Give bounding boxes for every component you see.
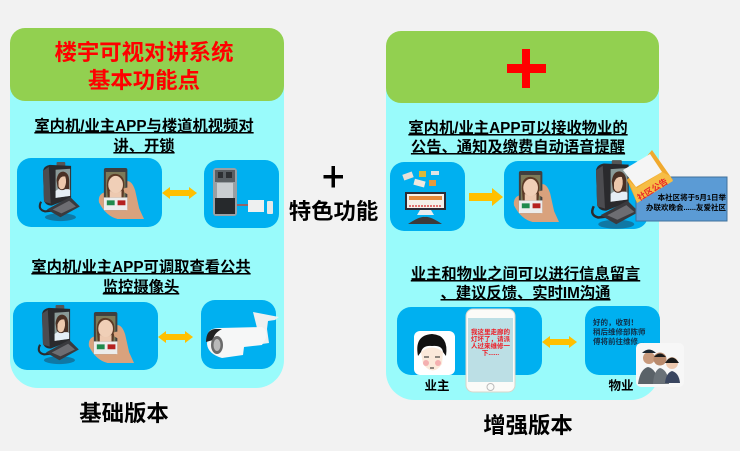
plus sign between versions xyxy=(324,166,343,188)
panel: surveillance camera xyxy=(201,300,279,369)
icon: owner avatar xyxy=(414,331,455,375)
panel: indoor unit and app xyxy=(17,158,162,227)
arrow: two-way messages xyxy=(542,336,577,348)
panel: property reply: 好的，收到！ xyxy=(593,318,638,327)
panel: door station with lock xyxy=(204,160,279,228)
panel: property reply xyxy=(585,306,660,375)
icon: phone with message: 灯坏了，请派 xyxy=(471,334,510,343)
label: basic version: 基础版本 xyxy=(79,401,169,426)
panel header: basic features title xyxy=(10,28,284,101)
panel header: basic features title: 楼宇可视对讲系统 xyxy=(54,40,234,65)
panel header with red plus xyxy=(386,31,659,103)
callout: community notice xyxy=(636,177,727,221)
arrow: notice to devices xyxy=(469,188,503,206)
panel: property reply: 傅将前往维修... xyxy=(593,336,644,346)
heading: view public cameras: 室内机/业主APP可调取查看公共 xyxy=(31,259,251,276)
arrow: two-way camera xyxy=(158,331,193,343)
panel header: basic features title: 基本功能点 xyxy=(88,68,200,93)
panel: resident devices xyxy=(504,160,648,229)
icon: phone with message xyxy=(466,309,515,392)
panel: property management computer xyxy=(390,162,465,231)
icon: phone with message: 人过来维修一 xyxy=(471,341,510,350)
icon: phone with message: 我这里走廊的 xyxy=(471,329,510,336)
photo: property staff xyxy=(636,343,684,387)
heading: messages and IM: 、建议反馈、实时IM沟通 xyxy=(441,284,610,302)
label: special features: 特色功能 xyxy=(289,199,378,224)
panel: basic version xyxy=(10,28,284,388)
heading: notices and reminders: 公告、通知及缴费自动语音提醒 xyxy=(411,138,625,156)
label: owner: 业主 xyxy=(424,378,450,393)
heading: view public cameras: 监控摄像头 xyxy=(103,278,179,296)
icon: notice envelope xyxy=(623,150,673,203)
callout: community notice: 办联欢晚会......友爱社区 xyxy=(646,202,726,212)
arrow: two-way xyxy=(162,187,197,199)
panel: owner message xyxy=(397,307,542,392)
heading: messages and IM: 业主和物业之间可以进行信息留言 xyxy=(411,266,640,283)
heading: video intercom and unlock: 讲、开锁 xyxy=(113,137,175,155)
heading: notices and reminders: 室内机/业主APP可以接收物业的 xyxy=(408,120,628,137)
panel: indoor unit and app, camera view xyxy=(13,302,158,370)
panel: property reply: 稍后维修部陈师 xyxy=(593,326,646,336)
panel: enhanced version xyxy=(386,31,660,400)
label: enhanced version: 增强版本 xyxy=(483,413,573,438)
icon: notice envelope: 社区公告 xyxy=(635,176,669,203)
label: property: 物业 xyxy=(608,378,634,393)
callout: community notice: 本社区将于5月1日举 xyxy=(658,192,726,202)
heading: video intercom and unlock: 室内机/业主APP与楼道机视频对 xyxy=(34,118,254,135)
icon: phone with message: 下...... xyxy=(482,349,499,357)
